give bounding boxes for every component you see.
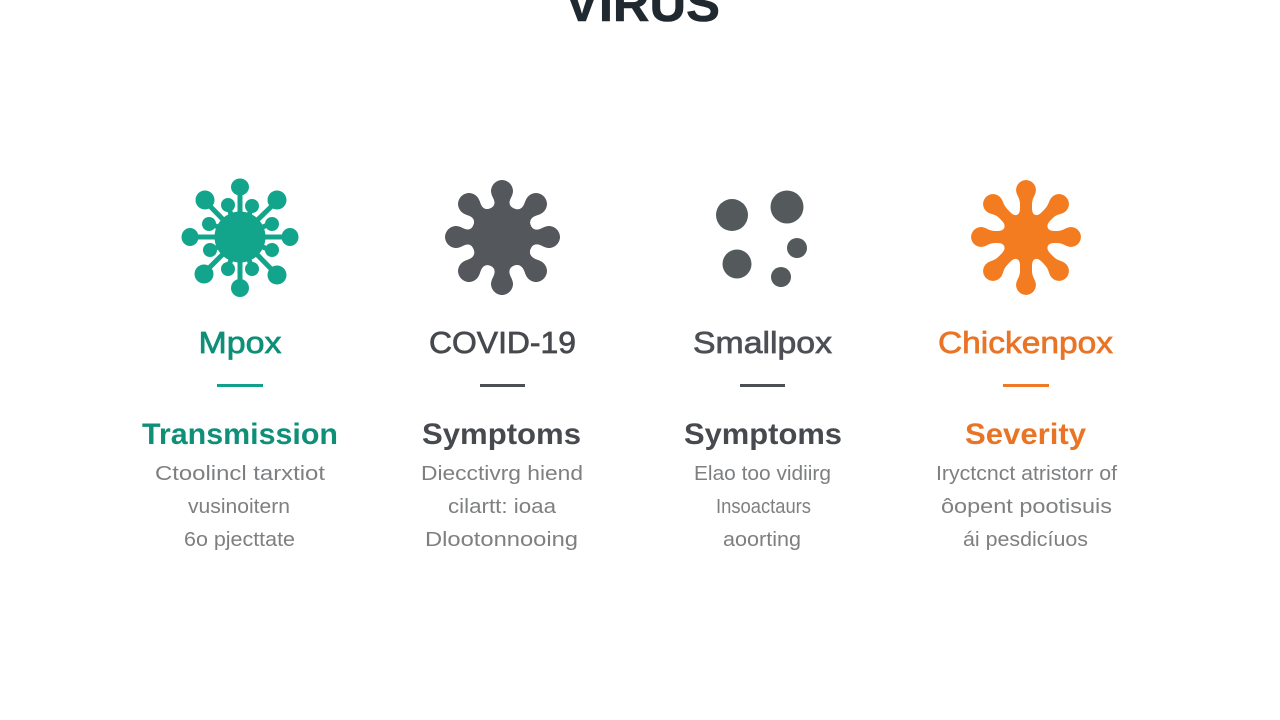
text block: Mpox description: vusinoitern: [188, 495, 290, 518]
icon: Chickenpox virus: [972, 180, 1080, 294]
name: Chickenpox: Chickenpox: [938, 325, 1114, 360]
heading: Transmission: Transmission: [142, 418, 338, 451]
text block: Mpox description: [155, 462, 325, 551]
heading: Symptoms: Symptoms: [684, 418, 842, 451]
panel: COVID-19: [421, 180, 583, 551]
panel: Mpox: [142, 178, 338, 551]
text block: Chickenpox description: ôopent pootisuis: [941, 495, 1112, 518]
text block: COVID-19 description: Diecctivrg hiend: [421, 462, 583, 485]
text block: COVID-19 description: cilartt: ioaa: [448, 495, 557, 518]
text block: Chickenpox description: Iryctcnct atristorr of: [936, 462, 1117, 485]
heading: Symptoms: Symptoms: [422, 418, 581, 451]
divider: Chickenpox: [1003, 384, 1049, 387]
icon: Mpox virus: [182, 178, 298, 297]
divider: Mpox: [217, 384, 263, 387]
name: Mpox: Mpox: [198, 325, 282, 360]
icon: Smallpox particles: [716, 190, 807, 287]
text block: Smallpox description: Elao too vidiirg: [694, 462, 831, 485]
text block: Smallpox description: aoorting: [723, 528, 801, 551]
text block: Chickenpox description: ái pesdicíuos: [963, 528, 1088, 551]
text block: Mpox description: 6o pjecttate: [184, 528, 295, 551]
divider: Smallpox: [740, 384, 785, 387]
text block: Mpox description: Ctoolincl tarxtiot: [155, 462, 325, 485]
panel: Chickenpox: [936, 180, 1117, 551]
text block: COVID-19 description: [421, 462, 583, 551]
name: COVID-19: COVID-19: [429, 325, 576, 360]
text block: Smallpox description: Insoactaurs: [716, 495, 811, 518]
name: Smallpox: Smallpox: [693, 325, 833, 360]
icon: COVID-19 virus: [446, 180, 560, 294]
text block: Smallpox description: [694, 462, 831, 551]
text block: COVID-19 description: Dlootonnooing: [425, 528, 578, 551]
divider: COVID-19: [480, 384, 525, 387]
text block: Chickenpox description: [936, 462, 1117, 551]
panel: Smallpox: [684, 190, 842, 551]
heading: Severity: Severity: [965, 418, 1086, 451]
